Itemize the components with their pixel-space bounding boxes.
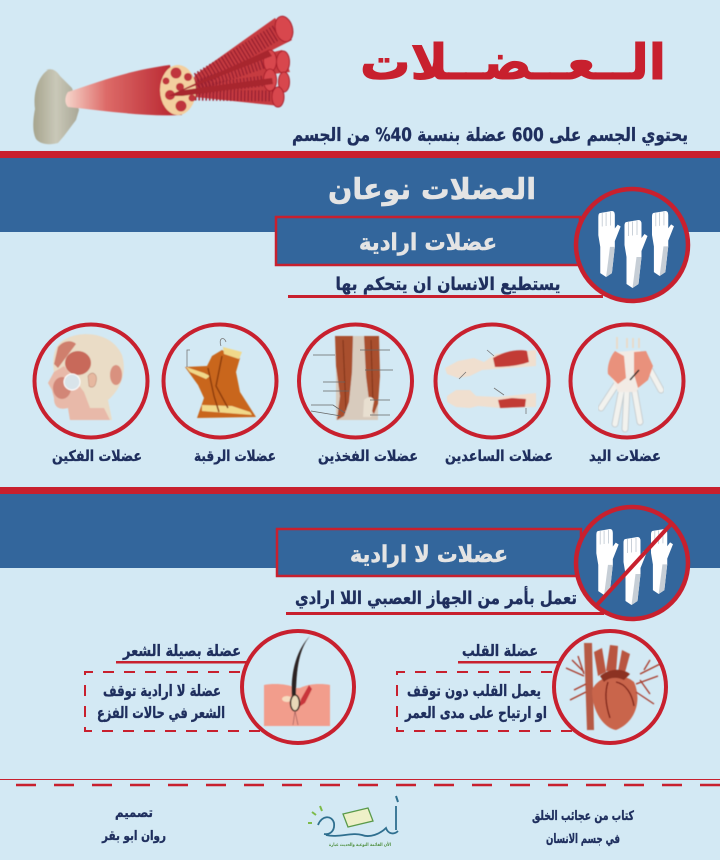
item: forearm muscles — [436, 324, 548, 438]
item: hand muscles — [570, 324, 684, 438]
box: involuntary muscles — [277, 529, 581, 576]
text: hair follicle description: عضلة لا ارادية توقف — [103, 682, 221, 700]
text: heart description: او ارتياح على مدى العمر — [404, 704, 547, 722]
icon: raised hands — [576, 189, 688, 301]
text: involuntary description: تعمل بأمر من الجهاز العصبي اللا ارادي — [295, 586, 577, 609]
footer: book credit: في جسم الانسان — [546, 832, 620, 847]
footer: designer credit: تصميم — [115, 806, 153, 821]
illustration: muscle fibre bundle — [33, 14, 296, 144]
footer: book credit — [532, 809, 634, 847]
label: hand muscles: عضلات اليد — [589, 447, 661, 465]
label: jaw muscles: عضلات الفكين — [52, 447, 142, 465]
footer: designer credit: روان ابو بقر — [101, 829, 166, 844]
box: voluntary muscles: عضلات ارادية — [359, 230, 497, 256]
label: thigh muscles: عضلات الفخذين — [318, 447, 418, 465]
heading: two types: العضلات نوعان — [328, 172, 536, 206]
item: neck muscles — [164, 324, 276, 438]
box: voluntary muscles — [276, 217, 580, 265]
text: hair follicle description — [97, 682, 225, 723]
icon: crossed-out raised hands — [576, 507, 688, 619]
text: heart description — [404, 682, 547, 722]
item: jaw muscles — [34, 324, 148, 438]
panel: heart muscle — [397, 631, 666, 743]
section band: involuntary — [0, 487, 720, 568]
subtitle: يحتوي الجسم على 600 عضلة بنسبة 40% من الجسم — [292, 125, 688, 147]
text: hair follicle description: الشعر في حالات الفزع — [97, 704, 225, 723]
item: thigh muscles — [299, 324, 412, 438]
footer rules — [0, 779, 720, 785]
label: neck muscles: عضلات الرقبة — [194, 447, 276, 465]
panel: hair follicle muscle — [85, 631, 354, 743]
title: الــعــضــلات — [360, 34, 666, 91]
footer: book credit: كتاب من عجائب الخلق — [532, 809, 634, 824]
label: hair follicle muscle: عضلة بصيلة الشعر — [122, 642, 241, 660]
footer: logo — [308, 796, 398, 848]
text: voluntary description: يستطيع الانسان ان يتحكم بها — [336, 274, 560, 295]
text: heart description: يعمل القلب دون توقف — [407, 682, 541, 700]
label: forearm muscles: عضلات الساعدين — [445, 447, 553, 465]
footer: designer credit — [101, 806, 166, 844]
footer: logo: الأن القائمة النوعية والحديث عبارة — [329, 841, 391, 848]
box: involuntary muscles: عضلات لا ارادية — [350, 542, 508, 568]
text: involuntary description — [286, 586, 604, 615]
label: heart muscle: عضلة القلب — [462, 642, 538, 660]
section band: voluntary — [0, 151, 720, 232]
